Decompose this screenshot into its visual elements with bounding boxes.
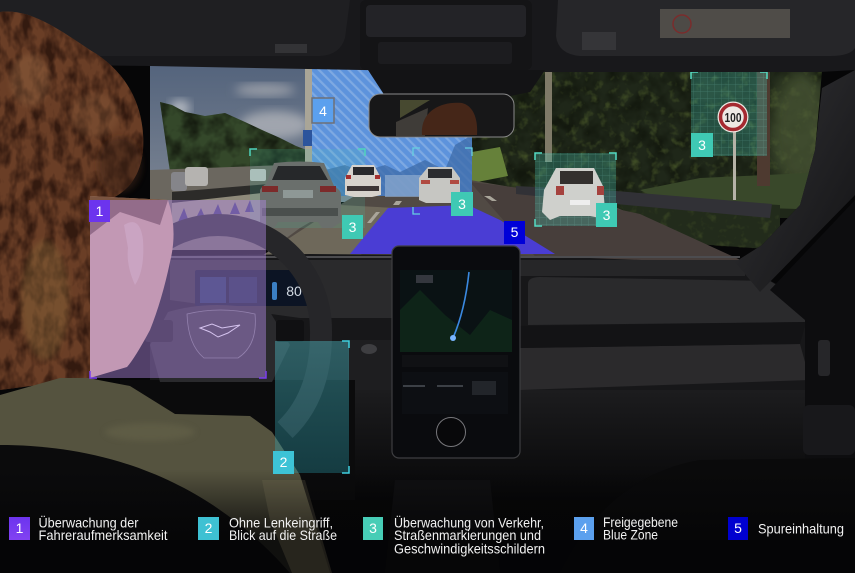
legend item 3: Geschwindigkeitsschildern xyxy=(394,540,545,556)
legend item 5: Spureinhaltung xyxy=(758,520,844,536)
legend item 3: Straßenmarkierungen und xyxy=(394,527,541,543)
car: grey sedan xyxy=(260,162,341,228)
legend item 3: Überwachung von Verkehr, xyxy=(394,514,544,530)
driver head and neck xyxy=(90,196,174,378)
legend item 2 xyxy=(198,514,337,543)
badge 3 sign: 3 xyxy=(698,137,706,153)
badge 2: 2 xyxy=(280,454,288,470)
guard rail xyxy=(516,186,772,218)
badge 4 xyxy=(312,98,334,123)
center tunnel xyxy=(385,480,500,573)
steering wheel xyxy=(115,225,321,430)
detection box: speed sign xyxy=(691,72,767,156)
legend item 1: 1 xyxy=(16,520,24,536)
badge 3 suv: 3 xyxy=(458,196,466,212)
visor clips xyxy=(275,44,307,53)
badge 3 hatchback xyxy=(596,203,617,227)
panel: lane keeping surface xyxy=(350,205,555,254)
badge 3 suv xyxy=(451,192,473,216)
legend item 1: Überwachung der xyxy=(38,514,139,530)
badge 1 xyxy=(89,200,110,222)
highlight: driver attention xyxy=(90,200,266,378)
rear view mirror xyxy=(368,70,545,137)
visor sticker xyxy=(660,9,790,38)
left tree line xyxy=(160,102,312,172)
small cars left xyxy=(171,172,187,191)
median with planting xyxy=(172,193,262,240)
driver footwell xyxy=(120,380,355,500)
center touch screen xyxy=(392,246,520,458)
bottom fade xyxy=(0,470,855,540)
badge 3 sign xyxy=(691,133,713,157)
instrument cluster xyxy=(195,270,310,306)
legend item 2: 2 xyxy=(205,520,213,536)
instrument cluster: 80 xyxy=(286,283,302,299)
legend item 2: Blick auf die Straße xyxy=(229,527,337,543)
passenger seat xyxy=(560,458,855,573)
sun visor left xyxy=(0,0,350,56)
driver shirt xyxy=(0,378,330,573)
road main xyxy=(262,180,745,262)
legend item 1: Fahreraufmerksamkeit xyxy=(38,527,168,543)
car: white hatchback xyxy=(542,168,605,220)
car: white suv xyxy=(345,165,381,197)
panel: road view through windshield xyxy=(150,62,830,262)
panel: blue zone overlay xyxy=(312,66,472,197)
seat back xyxy=(0,445,290,573)
badge 4: 4 xyxy=(319,103,327,119)
speed sign 100 xyxy=(718,102,748,200)
dashboard xyxy=(120,254,855,500)
road dashes xyxy=(367,196,497,223)
badge 3 car xyxy=(342,215,363,239)
door and pillar xyxy=(735,70,855,460)
legend item 1 xyxy=(9,514,168,543)
badge 5: 5 xyxy=(511,224,519,240)
dash pad right xyxy=(528,277,807,325)
detection box: grey sedan xyxy=(250,149,365,228)
legend item 3 xyxy=(363,514,545,556)
driver hair xyxy=(0,0,150,395)
badge 5 xyxy=(504,221,525,244)
lit shirt sleeve xyxy=(262,480,332,573)
detection box: silver suv xyxy=(413,148,472,214)
legend item 3: 3 xyxy=(369,520,377,536)
sun visor right xyxy=(556,0,855,56)
car: silver suv xyxy=(419,167,460,203)
speed sign 100: 100 xyxy=(724,110,742,125)
legend item 2: Ohne Lenkeingriff, xyxy=(229,514,333,530)
grass under guard rail xyxy=(649,204,780,248)
pole right xyxy=(545,72,552,162)
lower dash strip right xyxy=(520,344,810,390)
pole left and sign xyxy=(305,65,312,165)
legend item 5: 5 xyxy=(734,520,742,536)
badge 1: 1 xyxy=(96,203,104,219)
dash top left padding xyxy=(170,260,392,318)
highlight: hands-free xyxy=(275,341,349,473)
left carriageway xyxy=(150,164,312,250)
legend item 5 xyxy=(728,517,844,540)
lower console shade xyxy=(350,390,855,500)
roof lining xyxy=(0,0,855,72)
badge 3 hatchback: 3 xyxy=(603,207,611,223)
detection box: hatchback xyxy=(535,153,616,226)
legend item 4 xyxy=(574,514,678,542)
shirt fold highlight xyxy=(105,423,195,441)
legend item 4: Blue Zone xyxy=(603,526,658,542)
right side foliage xyxy=(470,68,830,250)
legend item 4: Freigegebene xyxy=(603,514,678,530)
legend xyxy=(9,514,844,556)
badge 3 car: 3 xyxy=(349,219,357,235)
badge 2 xyxy=(273,451,294,474)
overhead console xyxy=(360,0,532,70)
legend item 4: 4 xyxy=(580,520,588,536)
